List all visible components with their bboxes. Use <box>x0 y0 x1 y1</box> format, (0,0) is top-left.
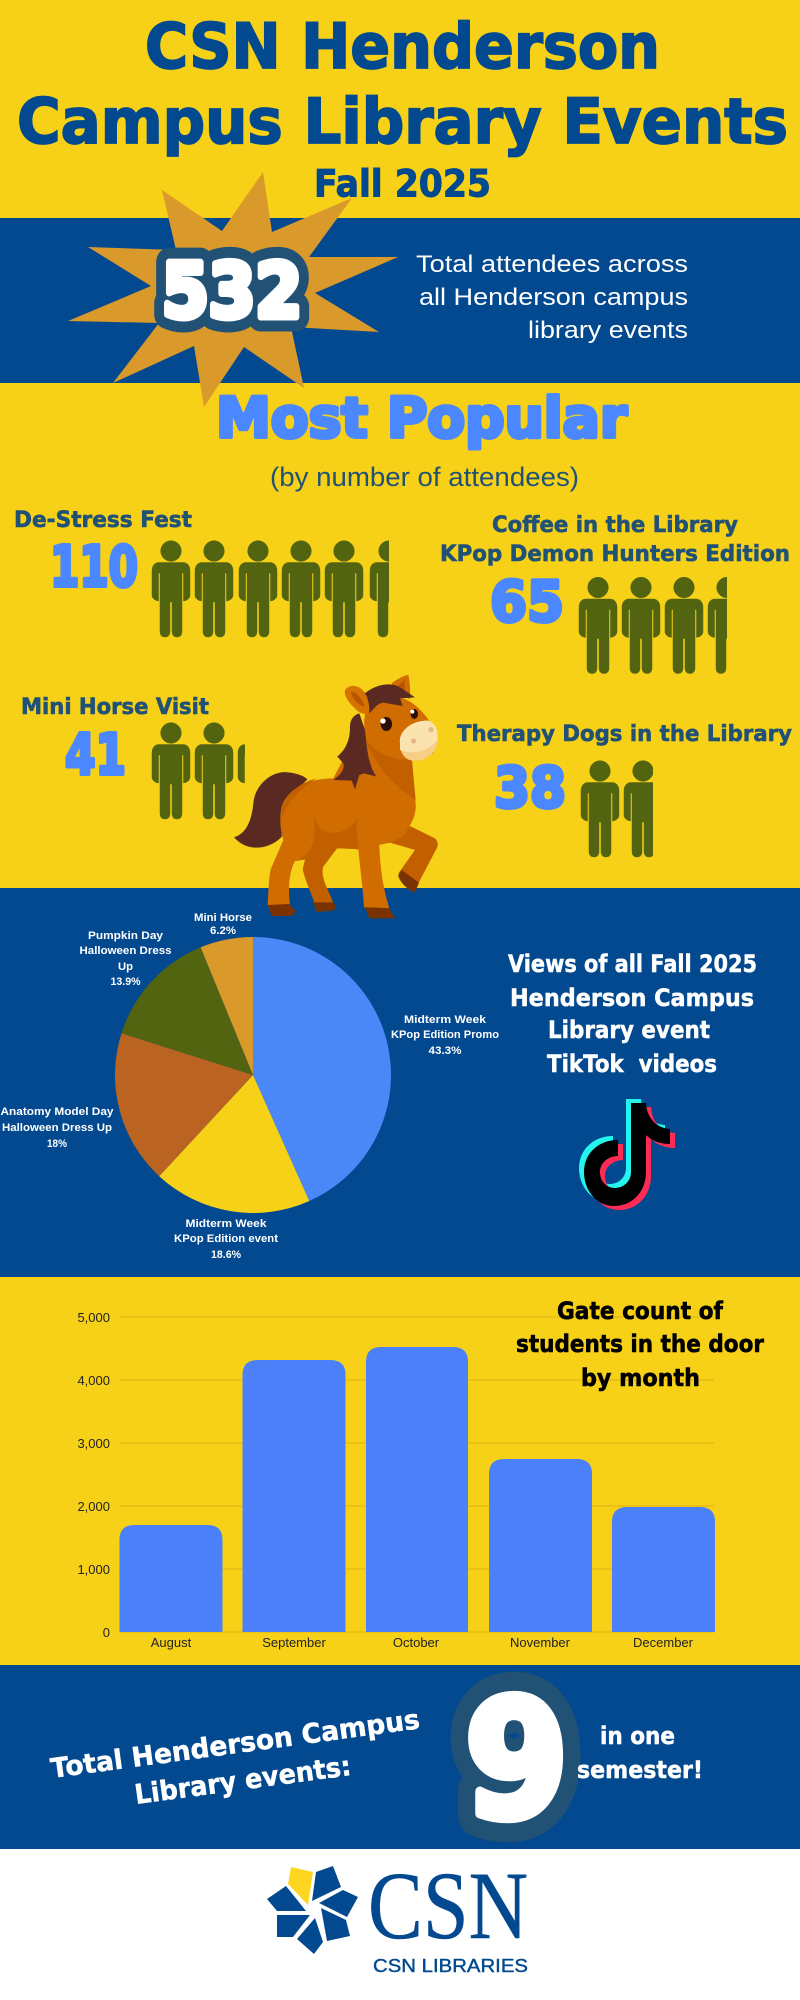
pie labels: Midterm Week <box>404 1014 487 1026</box>
bar chart: November <box>510 1635 571 1650</box>
title block: Campus Library Events <box>17 85 788 158</box>
pie labels: 6.2% <box>210 925 236 937</box>
panel background: total events blue band <box>0 1665 800 1849</box>
gate count heading <box>516 1297 764 1392</box>
icon: CSN star mark <box>267 1866 358 1954</box>
attendee description text: Total attendees across <box>416 251 688 278</box>
big number 532: 532 <box>162 247 302 335</box>
event: De-Stress Fest <box>14 507 408 637</box>
panel background: TikTok views blue band <box>0 888 800 1277</box>
pie labels: 18.6% <box>211 1249 241 1261</box>
pie labels: KPop Edition Promo <box>391 1029 499 1041</box>
slanted events text: Library events: <box>133 1751 353 1811</box>
event: Therapy Dogs in the Library: 38 <box>494 756 566 821</box>
bar chart: October <box>393 1635 440 1650</box>
event: Coffee in the Library <box>440 512 790 674</box>
TikTok views heading: TikTok videos <box>547 1050 717 1078</box>
bar chart <box>77 1310 715 1650</box>
bar chart: December <box>633 1635 694 1650</box>
illustration: horse <box>234 675 438 918</box>
event: De-Stress Fest: 110 <box>50 535 138 600</box>
event: Coffee in the Library: KPop Demon Hunters Edition <box>440 541 790 567</box>
pie labels: Mini Horse <box>194 912 252 924</box>
attendee description text: library events <box>528 317 688 344</box>
event: De-Stress Fest: De-Stress Fest <box>14 507 192 533</box>
title block: CSN Henderson <box>145 10 660 83</box>
big number 9: 9 <box>465 1667 568 1855</box>
pie labels: Midterm Week <box>186 1218 267 1230</box>
title block <box>17 10 788 206</box>
wordmark: CSN: CSN <box>368 1852 528 1959</box>
pie labels: KPop Edition event <box>174 1233 278 1245</box>
bar chart: 4,000 <box>77 1373 110 1388</box>
event: Mini Horse Visit <box>22 696 245 820</box>
pie labels: 13.9% <box>110 976 141 988</box>
pie labels: Halloween Dress <box>80 945 172 957</box>
panel: gate count <box>77 1297 764 1650</box>
TikTok views heading <box>508 950 757 1078</box>
icon: TikTok logo <box>579 1099 675 1210</box>
heading: Most Popular: Most Popular <box>216 386 627 450</box>
pie labels: Halloween Dress Up <box>2 1122 112 1134</box>
event: Therapy Dogs in the Library <box>457 721 792 857</box>
panel: TikTok views <box>0 912 757 1261</box>
gate count heading: Gate count of <box>557 1297 723 1325</box>
event: Mini Horse Visit: 41 <box>65 723 126 788</box>
panel background: most popular yellow band <box>0 383 800 888</box>
title block: Fall 2025 <box>314 162 491 206</box>
pie labels: 43.3% <box>428 1045 462 1057</box>
bar chart: 5,000 <box>77 1310 110 1325</box>
pie chart <box>115 937 391 1213</box>
pie labels: Up <box>118 961 133 973</box>
bar chart: 3,000 <box>77 1436 110 1451</box>
panel background: total attendees blue band <box>0 218 800 383</box>
panel background: gate count yellow band <box>0 1277 800 1665</box>
bar chart: August <box>151 1635 192 1650</box>
icon: starburst <box>68 172 398 407</box>
big number 532: 532 <box>162 247 302 335</box>
TikTok views heading: Views of all Fall 2025 <box>508 950 757 978</box>
wordmark: CSN Libraries: CSN LIBRARIES <box>373 1956 528 1976</box>
pie labels: Pumpkin Day <box>88 930 164 942</box>
bar chart: 0 <box>103 1625 110 1640</box>
panel background: header yellow band <box>0 0 800 218</box>
panel: total attendees <box>68 172 688 407</box>
bar chart: 1,000 <box>77 1562 110 1577</box>
pie labels: Anatomy Model Day <box>0 1106 114 1118</box>
in one semester text: semester! <box>577 1756 703 1784</box>
pie labels <box>0 912 499 1261</box>
event: Coffee in the Library: 65 <box>490 570 564 635</box>
event: Coffee in the Library: Coffee in the Library <box>492 512 738 538</box>
panel background: footer white band <box>0 1849 800 2000</box>
in one semester text <box>577 1722 703 1784</box>
panel: total events <box>49 1667 703 1855</box>
attendee description text: all Henderson campus <box>419 284 688 311</box>
slanted events text: Total Henderson Campus <box>49 1704 422 1785</box>
in one semester text: in one <box>600 1722 675 1750</box>
panel: most popular events <box>14 386 792 857</box>
bar chart: 2,000 <box>77 1499 110 1514</box>
TikTok views heading: Library event <box>548 1016 710 1044</box>
gate count heading: by month <box>581 1364 700 1392</box>
gate count heading: students in the door <box>516 1330 764 1358</box>
pie labels: 18% <box>47 1138 67 1150</box>
bar chart: September <box>262 1635 326 1650</box>
TikTok views heading: Henderson Campus <box>510 984 754 1012</box>
big number 9: 9 <box>465 1667 568 1855</box>
footer: CSN logo <box>267 1852 528 1976</box>
subheading: by number of attendees: (by number of attendees) <box>270 462 579 492</box>
event: Mini Horse Visit: Mini Horse Visit <box>21 694 209 720</box>
attendee description text <box>416 251 688 344</box>
